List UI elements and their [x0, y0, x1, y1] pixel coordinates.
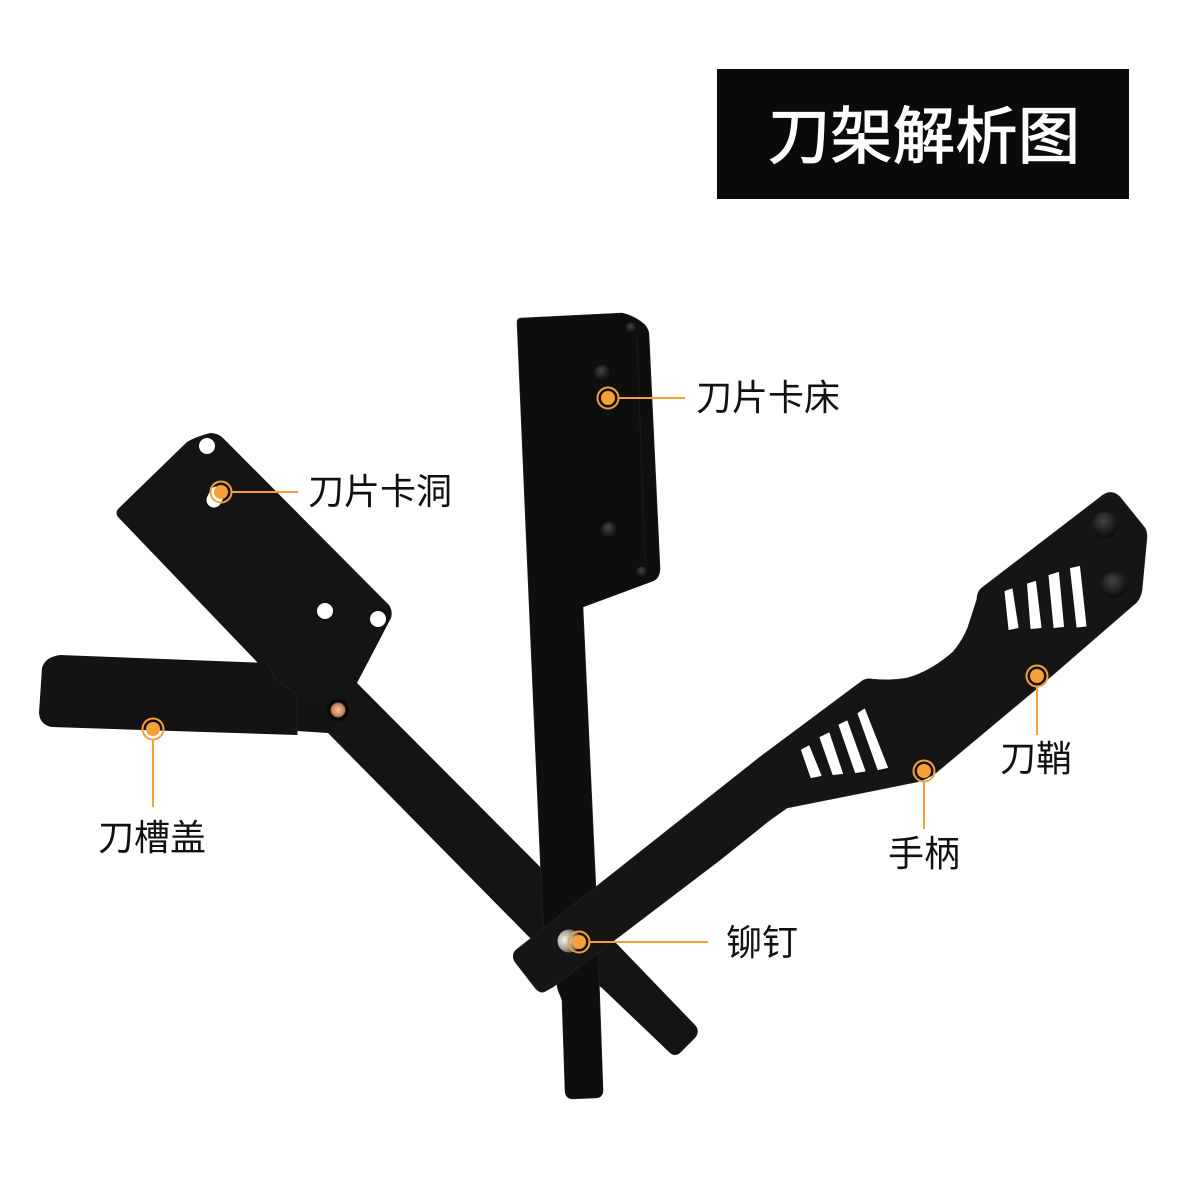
hole: corner	[370, 611, 386, 627]
razor part: blade groove cover	[39, 655, 349, 735]
callout: 刀鞘	[1000, 666, 1072, 779]
title: 刀架解析图	[768, 103, 1080, 172]
callout: 手柄: 手柄	[888, 833, 960, 874]
hole: top corner	[199, 438, 215, 454]
slots: upper group	[1005, 566, 1086, 630]
hole: blade slot	[214, 494, 217, 500]
callout: 刀槽盖: 刀槽盖	[98, 817, 206, 858]
title	[717, 69, 1129, 199]
razor part: blade holder	[517, 313, 660, 1099]
bolt: sheath bottom	[1101, 572, 1127, 598]
bolt: bottom corner	[636, 566, 648, 578]
callout: 刀片卡床	[598, 377, 840, 418]
callout: 刀槽盖	[98, 718, 206, 858]
callout: 刀片卡洞: 刀片卡洞	[308, 471, 452, 512]
hole: inner	[317, 603, 333, 619]
rivet: silver pivot	[558, 930, 580, 952]
callout: 手柄	[888, 760, 960, 874]
rivet: copper	[327, 699, 349, 721]
bolt: sheath top	[1092, 512, 1118, 538]
slots: lower group	[802, 709, 888, 778]
bolt: lower	[601, 522, 617, 538]
razor part: slotted plate and arm	[116, 433, 698, 1055]
callout: 铆钉: 铆钉	[726, 922, 798, 963]
callout: 刀鞘: 刀鞘	[1000, 738, 1072, 779]
bolt: top corner	[626, 322, 636, 334]
razor part: handle and sheath	[513, 492, 1147, 992]
callout: 刀片卡洞	[210, 471, 452, 512]
callout: 铆钉	[568, 922, 798, 963]
bolt: upper	[594, 365, 610, 381]
callout: 刀片卡床: 刀片卡床	[696, 377, 840, 418]
